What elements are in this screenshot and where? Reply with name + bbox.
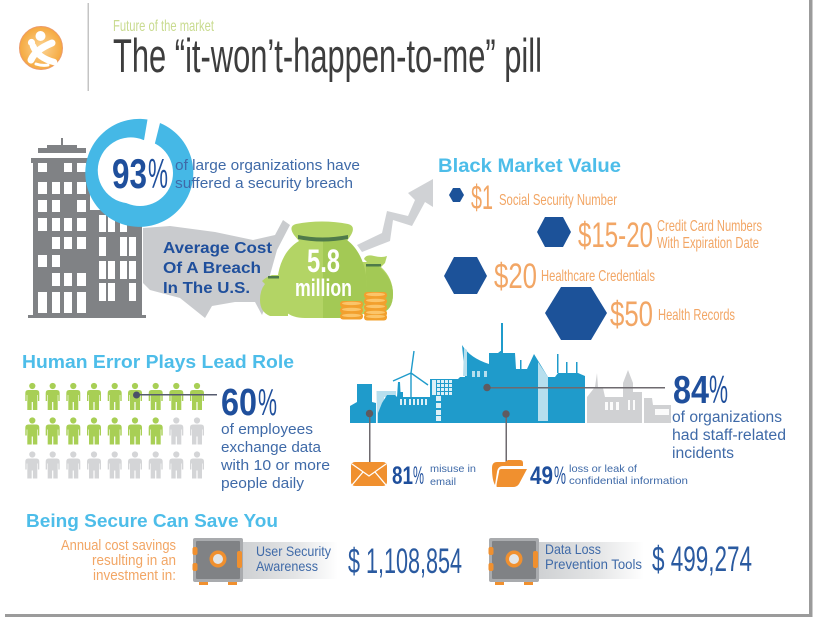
annual cost savings note: investment in: <box>93 568 176 584</box>
pointers on skyline <box>366 384 665 464</box>
building illustration <box>28 138 146 318</box>
value $20: $20 <box>494 257 537 296</box>
stat 84%: % <box>709 369 728 412</box>
stat 49% loss or leak: confidential information <box>569 475 688 487</box>
heading: human error: Human Error Plays Lead Role <box>22 352 294 372</box>
heading: being secure: Being Secure Can Save You <box>26 511 278 531</box>
stat 84%: had staff-related <box>672 427 786 444</box>
stat 84%: of organizations <box>672 409 782 426</box>
average cost label: In The U.S. <box>163 280 250 297</box>
average cost label: Average Cost <box>163 240 273 257</box>
stat 81% misuse in email <box>392 462 476 490</box>
saving: data loss prevention tools: $ 499,274 <box>652 540 752 579</box>
value $1: $1 <box>471 179 493 217</box>
5.8 million label: 5.8 <box>307 243 340 279</box>
heading: black market value: Black Market Value <box>438 156 621 177</box>
coin stacks <box>340 292 387 320</box>
value $50 <box>610 295 735 334</box>
eyebrow: future of the market: Future of the market <box>113 18 214 35</box>
stat 81% misuse in email: 81 <box>392 462 413 490</box>
stat 84%: incidents <box>672 445 734 462</box>
average cost label <box>163 240 273 297</box>
saving: user security awareness: $ 1,108,854 <box>348 542 462 581</box>
stat 60%: % <box>258 382 277 424</box>
value $1 <box>471 179 617 217</box>
pictogram: employees <box>25 383 204 478</box>
donut chart 93%: % <box>148 150 168 197</box>
value $20 <box>494 257 655 296</box>
title: The “it-won’t-happen-to-me” pill <box>113 29 542 82</box>
stat 60%: 60 <box>221 382 257 424</box>
breach text: of large organizations have <box>175 157 360 174</box>
stat 81% misuse in email: email <box>430 476 456 488</box>
stat 81% misuse in email: % <box>413 462 424 490</box>
annual cost savings note: resulting in an <box>92 553 176 569</box>
saving: data loss prevention tools: Prevention Tools <box>545 556 642 572</box>
icon: envelope <box>351 462 387 486</box>
hexagon $15-20 <box>537 217 571 247</box>
breach text <box>175 157 360 192</box>
value $50: Health Records <box>658 307 735 324</box>
stat 49% loss or leak <box>530 462 688 490</box>
pointer to 60% <box>133 392 217 398</box>
saving: data loss prevention tools: Data Loss <box>545 541 601 557</box>
stat 60%: with 10 or more <box>220 457 330 474</box>
saving: data loss prevention tools <box>488 538 752 585</box>
donut chart 93%: 93 <box>112 150 147 197</box>
value $15-20 <box>578 216 762 255</box>
US map <box>143 220 290 318</box>
stat 60%: exchange data <box>221 439 322 456</box>
money bags <box>260 222 393 318</box>
stat 60%: people daily <box>221 475 305 492</box>
icon: folder <box>492 460 527 487</box>
saving: user security awareness: Awareness <box>256 558 318 574</box>
donut chart 93% <box>85 119 193 227</box>
stat 84% <box>672 369 786 462</box>
value $15-20: $15-20 <box>578 216 653 255</box>
hexagon $50 <box>545 287 607 340</box>
logo <box>20 26 62 70</box>
5.8 million label <box>295 243 352 302</box>
stat 49% loss or leak: % <box>554 462 566 490</box>
stat 81% misuse in email: misuse in <box>430 463 476 475</box>
stat 49% loss or leak: loss or leak of <box>569 463 637 475</box>
city skyline <box>350 323 671 423</box>
breach text: suffered a security breach <box>175 175 353 192</box>
value $15-20: Credit Card Numbers <box>657 218 762 235</box>
stat 60%: of employees <box>221 421 313 438</box>
stat 60% <box>220 382 330 492</box>
hexagon $1 <box>449 188 464 202</box>
saving: user security awareness: User Security <box>256 543 331 559</box>
value $15-20: With Expiration Date <box>657 235 759 252</box>
stat 49% loss or leak: 49 <box>530 462 553 490</box>
annual cost savings note: Annual cost savings <box>61 538 176 554</box>
header divider <box>88 3 89 91</box>
value $20: Healthcare Credentials <box>541 268 655 285</box>
stat 84%: 84 <box>673 369 709 412</box>
rising arrow <box>357 179 433 252</box>
5.8 million label: million <box>295 275 352 302</box>
hexagon $20 <box>444 257 487 294</box>
average cost label: Of A Breach <box>163 260 261 277</box>
annual cost savings note <box>61 538 176 584</box>
value $50: $50 <box>610 295 653 334</box>
value $1: Social Security Number <box>499 192 617 209</box>
saving: user security awareness <box>192 538 462 585</box>
